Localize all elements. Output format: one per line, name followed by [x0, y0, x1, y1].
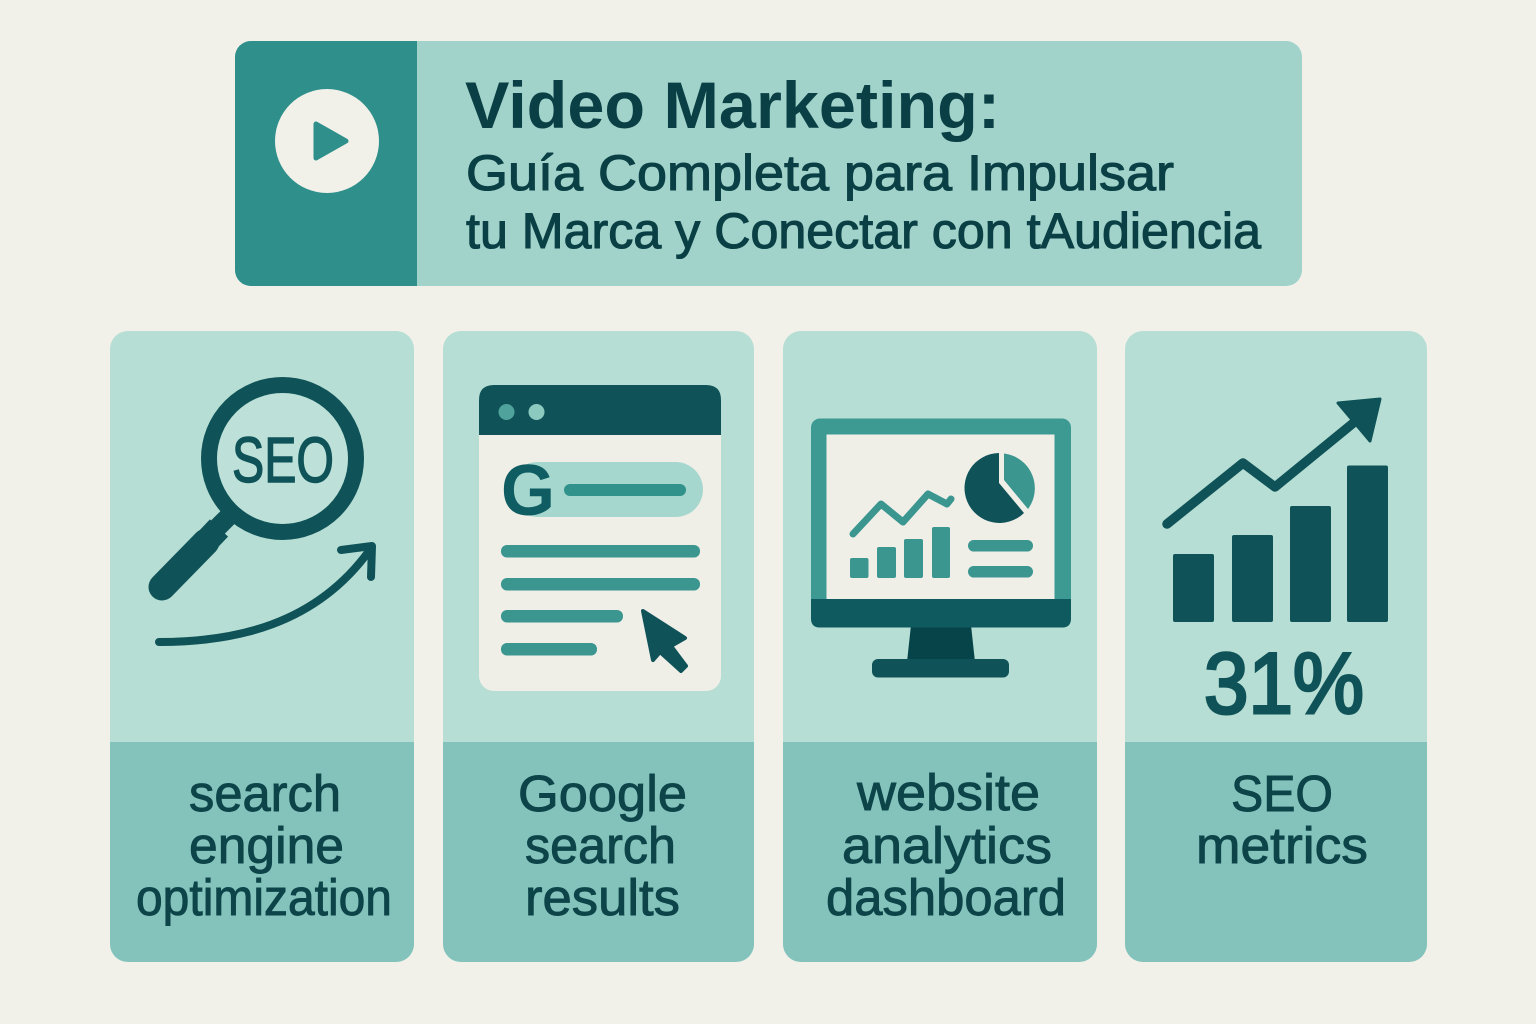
label: search engine optimization: optimization [136, 869, 392, 926]
label: SEO metrics [1196, 765, 1368, 874]
title text: Guía Completa para Impulsar [466, 145, 1174, 201]
label: website analytics dashboard [826, 764, 1066, 926]
panel: website analytics dashboard [783, 331, 1097, 962]
label: website analytics dashboard: analytics [842, 817, 1052, 874]
icon: analytics monitor [811, 418, 1071, 678]
label: Google search results [518, 765, 687, 926]
label: Google search results: results [525, 869, 680, 926]
banner play panel [235, 41, 417, 286]
icon: Google results browser: G [501, 451, 555, 531]
label: search engine optimization: engine [189, 817, 344, 874]
title banner [235, 41, 1302, 286]
label: Google search results: Google [518, 765, 687, 822]
panel: SEO metrics [1125, 331, 1427, 962]
label: website analytics dashboard: website [856, 764, 1040, 821]
metric: 31%: 31% [1204, 636, 1364, 732]
label: search engine optimization: search [189, 765, 341, 822]
icon: SEO magnifier with rising arrow [159, 385, 372, 642]
title text [465, 68, 1261, 259]
label: search engine optimization [136, 765, 392, 926]
icon: Google results browser [479, 385, 721, 691]
title text: Video Marketing: [465, 68, 1000, 142]
label: website analytics dashboard: dashboard [826, 869, 1066, 926]
panel: search engine optimization [110, 331, 414, 962]
panel: Google search results [443, 331, 754, 962]
title text: tu Marca y Conectar con tAudiencia [466, 203, 1261, 259]
label: SEO metrics: SEO [1231, 765, 1333, 822]
icon: SEO magnifier with rising arrow: SEO [232, 424, 334, 496]
icon: play button [275, 89, 379, 193]
icon: SEO metrics growth chart [1167, 399, 1388, 732]
label: Google search results: search [525, 817, 676, 874]
label: SEO metrics: metrics [1196, 817, 1368, 874]
